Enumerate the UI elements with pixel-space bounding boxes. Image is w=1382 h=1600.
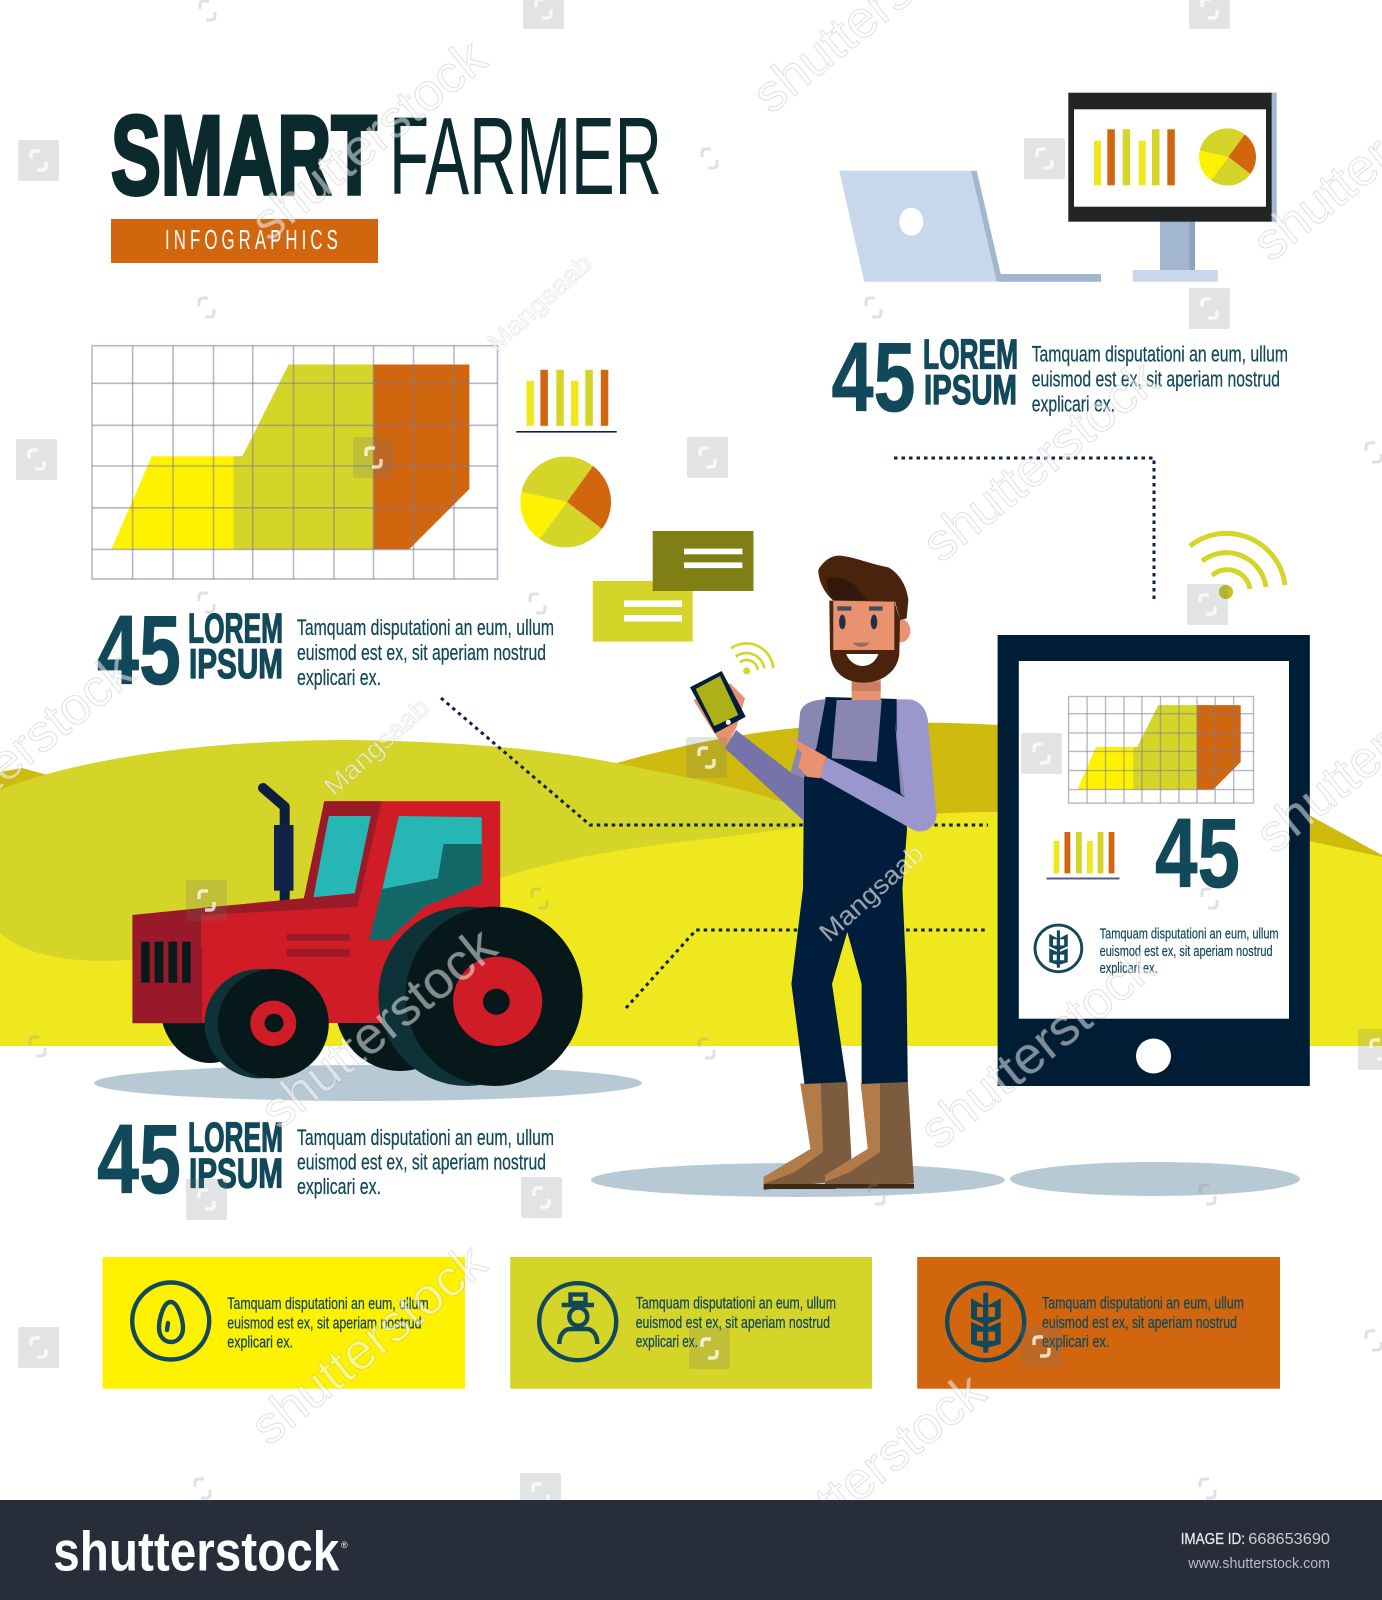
icon: farmer xyxy=(539,1283,616,1360)
panel text xyxy=(227,1294,429,1351)
stat block: bottom left: IPSUM xyxy=(189,1150,283,1197)
stat block: left middle: euismod est ex, sit aperiam nostrud xyxy=(297,640,546,665)
panel text xyxy=(636,1294,836,1351)
connector: monitor to tablet xyxy=(894,458,1154,601)
far wheels xyxy=(160,939,465,1071)
tablet text: Tamquam disputationi an eum, ullum xyxy=(1100,926,1279,942)
panel text: explicari ex. xyxy=(1042,1332,1110,1351)
footer image id: 668653690 xyxy=(1248,1531,1330,1548)
stat block: top right xyxy=(832,322,1288,432)
rear wheel xyxy=(378,907,583,1086)
watermarks: Mangsaab xyxy=(481,248,598,357)
panel text: explicari ex. xyxy=(636,1332,698,1351)
title: SMART xyxy=(111,93,377,218)
panel text xyxy=(1042,1294,1244,1351)
exhaust pipe xyxy=(263,788,294,900)
front wheel xyxy=(204,969,329,1078)
stat block: left middle xyxy=(97,595,554,705)
farmer xyxy=(690,556,937,1190)
small bar chart xyxy=(516,370,617,433)
stat block: bottom left: 45 xyxy=(97,1104,181,1214)
hand holding phone xyxy=(693,683,745,748)
area chart on grid xyxy=(92,346,498,579)
tablet number: 45 xyxy=(1155,798,1240,908)
watermarks: shutterstock xyxy=(912,349,1170,573)
footer logo: ® xyxy=(341,1540,348,1550)
watermarks: shutterstock xyxy=(240,28,498,252)
stat block: top right: 45 xyxy=(832,322,916,432)
watermarks: shutterstock xyxy=(739,1361,997,1585)
stat block: bottom left: explicari ex. xyxy=(297,1174,381,1199)
panel text: euismod est ex, sit aperiam nostrud xyxy=(636,1313,830,1332)
panel text: euismod est ex, sit aperiam nostrud xyxy=(1042,1313,1237,1332)
stat block: top right: IPSUM xyxy=(924,366,1017,413)
footer image id xyxy=(1181,1531,1330,1572)
ground shadows xyxy=(94,1065,1300,1197)
stat block: left middle: LOREM xyxy=(188,604,283,651)
stat block: bottom left xyxy=(97,1104,554,1214)
boots xyxy=(764,1082,914,1190)
panel text: euismod est ex, sit aperiam nostrud xyxy=(227,1313,422,1332)
banner: infographics: INFOGRAPHICS xyxy=(165,224,338,255)
icon: phone wifi xyxy=(731,643,773,674)
left shoulder xyxy=(791,699,826,778)
tablet text xyxy=(1100,926,1279,977)
panel: orange wheat xyxy=(917,1257,1280,1389)
panel: olive farmer xyxy=(510,1257,872,1389)
overalls xyxy=(791,697,908,1084)
tablet bar chart xyxy=(1046,832,1120,880)
landscape hills xyxy=(0,723,1382,1046)
watermarks: shutterstock xyxy=(240,1232,498,1456)
tablet xyxy=(998,635,1310,1086)
tablet area chart xyxy=(1069,696,1254,803)
watermarks: shutterstock xyxy=(250,916,508,1140)
tablet text: explicari ex. xyxy=(1100,960,1158,977)
icon: tablet wheat xyxy=(1035,925,1082,972)
phone xyxy=(690,671,746,733)
panel: yellow water xyxy=(102,1257,465,1389)
stat block: left middle: 45 xyxy=(97,595,181,705)
stat block: bottom left: LOREM xyxy=(188,1114,283,1161)
footer bar xyxy=(0,1500,1382,1600)
stat block: top right: LOREM xyxy=(923,330,1018,377)
chat bubbles xyxy=(593,531,754,642)
panel text: Tamquam disputationi an eum, ullum xyxy=(636,1294,836,1312)
connector: upper dotted line xyxy=(441,698,988,825)
banner: infographics xyxy=(111,219,378,263)
monitor xyxy=(1068,93,1277,282)
watermarks: Mangsaab xyxy=(813,838,930,947)
footer logo: shutterstock xyxy=(53,1520,340,1583)
laptop xyxy=(839,171,1101,282)
watermarks: Mangsaab xyxy=(318,692,435,801)
stat block: bottom left: Tamquam disputationi an eum, ullum xyxy=(297,1125,554,1150)
stat block: bottom left: euismod est ex, sit aperiam nostrud xyxy=(297,1150,546,1174)
stat block: top right: euismod est ex, sit aperiam nostrud xyxy=(1032,367,1280,392)
icon: wifi over tablet xyxy=(1190,533,1285,599)
stat block: top right: explicari ex. xyxy=(1032,392,1115,417)
left arm xyxy=(725,730,804,821)
connector: lower dotted line xyxy=(626,930,987,1008)
panel text: explicari ex. xyxy=(227,1332,293,1351)
pie chart xyxy=(520,457,611,547)
stat block: top right: Tamquam disputationi an eum, ullum xyxy=(1032,342,1288,367)
tractor body xyxy=(132,801,500,1023)
tractor xyxy=(132,788,583,1086)
panel text: Tamquam disputationi an eum, ullum xyxy=(1042,1294,1244,1312)
stat block: left middle: IPSUM xyxy=(189,640,283,687)
watermarks: shutterstock xyxy=(909,936,1167,1160)
shirt chest xyxy=(832,700,882,762)
panel text: Tamquam disputationi an eum, ullum xyxy=(227,1294,429,1313)
head xyxy=(818,556,910,702)
icon: wheat xyxy=(947,1283,1024,1360)
stat block: left middle: explicari ex. xyxy=(297,665,381,690)
right arm xyxy=(820,699,937,831)
title: FARMER xyxy=(389,95,662,218)
pointing hand xyxy=(790,737,827,778)
stat block: left middle: Tamquam disputationi an eum, ullum xyxy=(297,615,554,640)
footer image id: IMAGE ID: xyxy=(1181,1531,1245,1548)
tablet text: euismod est ex, sit aperiam nostrud xyxy=(1100,943,1273,960)
icon: water drop xyxy=(132,1282,209,1360)
footer image id: www.shutterstock.com xyxy=(1187,1555,1330,1572)
